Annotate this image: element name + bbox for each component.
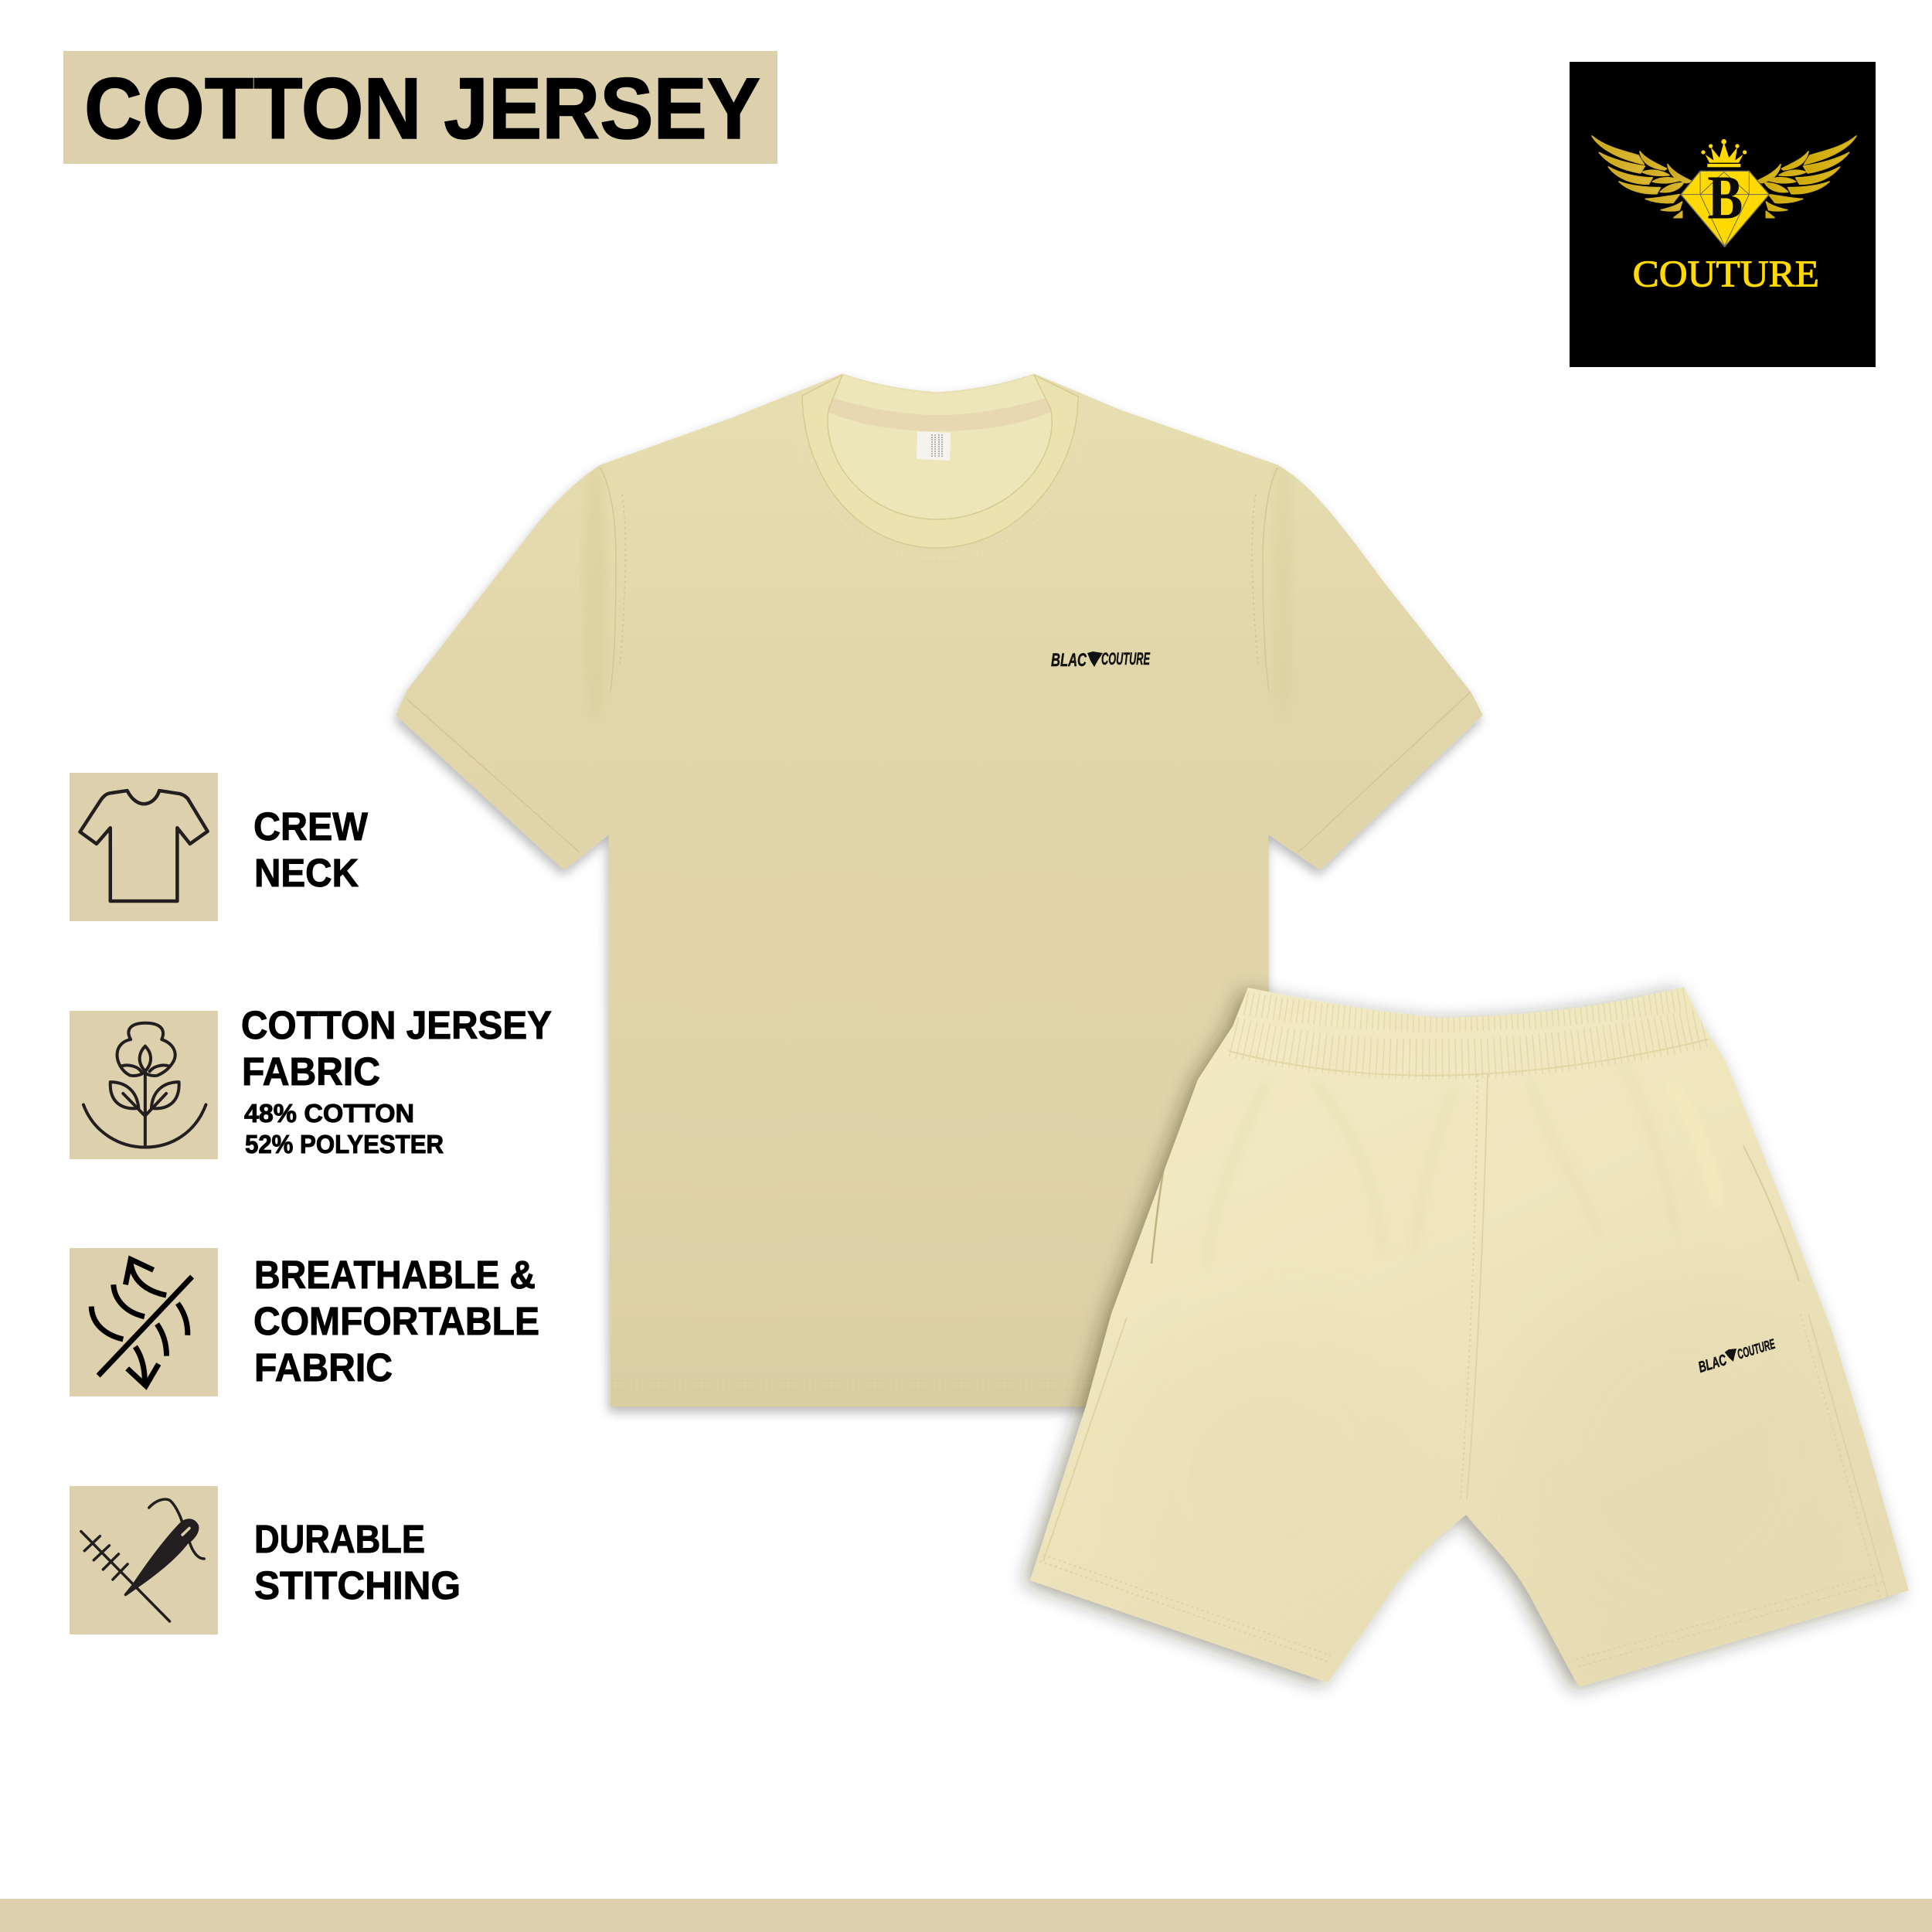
feature: breathable and comfortable fabric: COMFORTABLE [253, 1299, 539, 1343]
feature: crew neck [70, 773, 369, 921]
fabric folds [1206, 1066, 1677, 1267]
seams and hems [1039, 1074, 1888, 1667]
chest logo [1051, 649, 1151, 671]
left wing [1592, 136, 1692, 218]
feature: breathable and comfortable fabric: FABRIC [254, 1345, 393, 1389]
feature: cotton jersey fabric: 52% POLYESTER [245, 1130, 444, 1158]
feature: cotton jersey fabric [70, 1003, 552, 1159]
right wing [1756, 136, 1856, 218]
feature: crew neck: CREW [253, 804, 369, 849]
neck label [917, 431, 951, 461]
feature: durable stitching: DURABLE [254, 1517, 425, 1561]
chest logo: BLAC [1051, 650, 1087, 671]
shorts logo: COUTURE [1736, 1336, 1777, 1362]
stitching [407, 402, 1470, 1389]
neck tape [828, 396, 1052, 431]
wordmark: COUTURE [1633, 253, 1819, 295]
diamond [1681, 165, 1769, 247]
back of neck [828, 410, 1051, 519]
t-shirt [397, 375, 1481, 1406]
feature: cotton jersey fabric: COTTON JERSEY [241, 1003, 552, 1047]
title banner: COTTON JERSEY [84, 60, 760, 157]
feature: cotton jersey fabric: FABRIC [242, 1049, 380, 1094]
icon: airflow through fabric [91, 1260, 192, 1386]
shorts logo: BLAC [1696, 1352, 1729, 1376]
shorts [1030, 987, 1909, 1687]
diamond: B [1707, 165, 1743, 233]
pockets [1150, 1170, 1165, 1264]
feature: breathable and comfortable fabric: BREATHABLE & [254, 1253, 536, 1297]
icon: cotton plant [83, 1023, 206, 1148]
feature: durable stitching: STITCHING [254, 1563, 461, 1607]
feature: durable stitching [70, 1486, 461, 1634]
neck rib band [802, 375, 1078, 548]
crown [1701, 139, 1747, 167]
chest logo: COUTURE [1101, 649, 1151, 668]
icon: t-shirt [80, 791, 208, 901]
feature: cotton jersey fabric: 48% COTTON [244, 1099, 414, 1128]
icon: needle and thread [81, 1499, 204, 1621]
feature: breathable and comfortable fabric [70, 1248, 539, 1396]
brand logo [1570, 62, 1876, 367]
waistband gathers [1233, 998, 1703, 1060]
footer band [0, 1899, 1932, 1932]
feature: crew neck: NECK [254, 851, 359, 895]
shorts logo [1696, 1336, 1778, 1376]
